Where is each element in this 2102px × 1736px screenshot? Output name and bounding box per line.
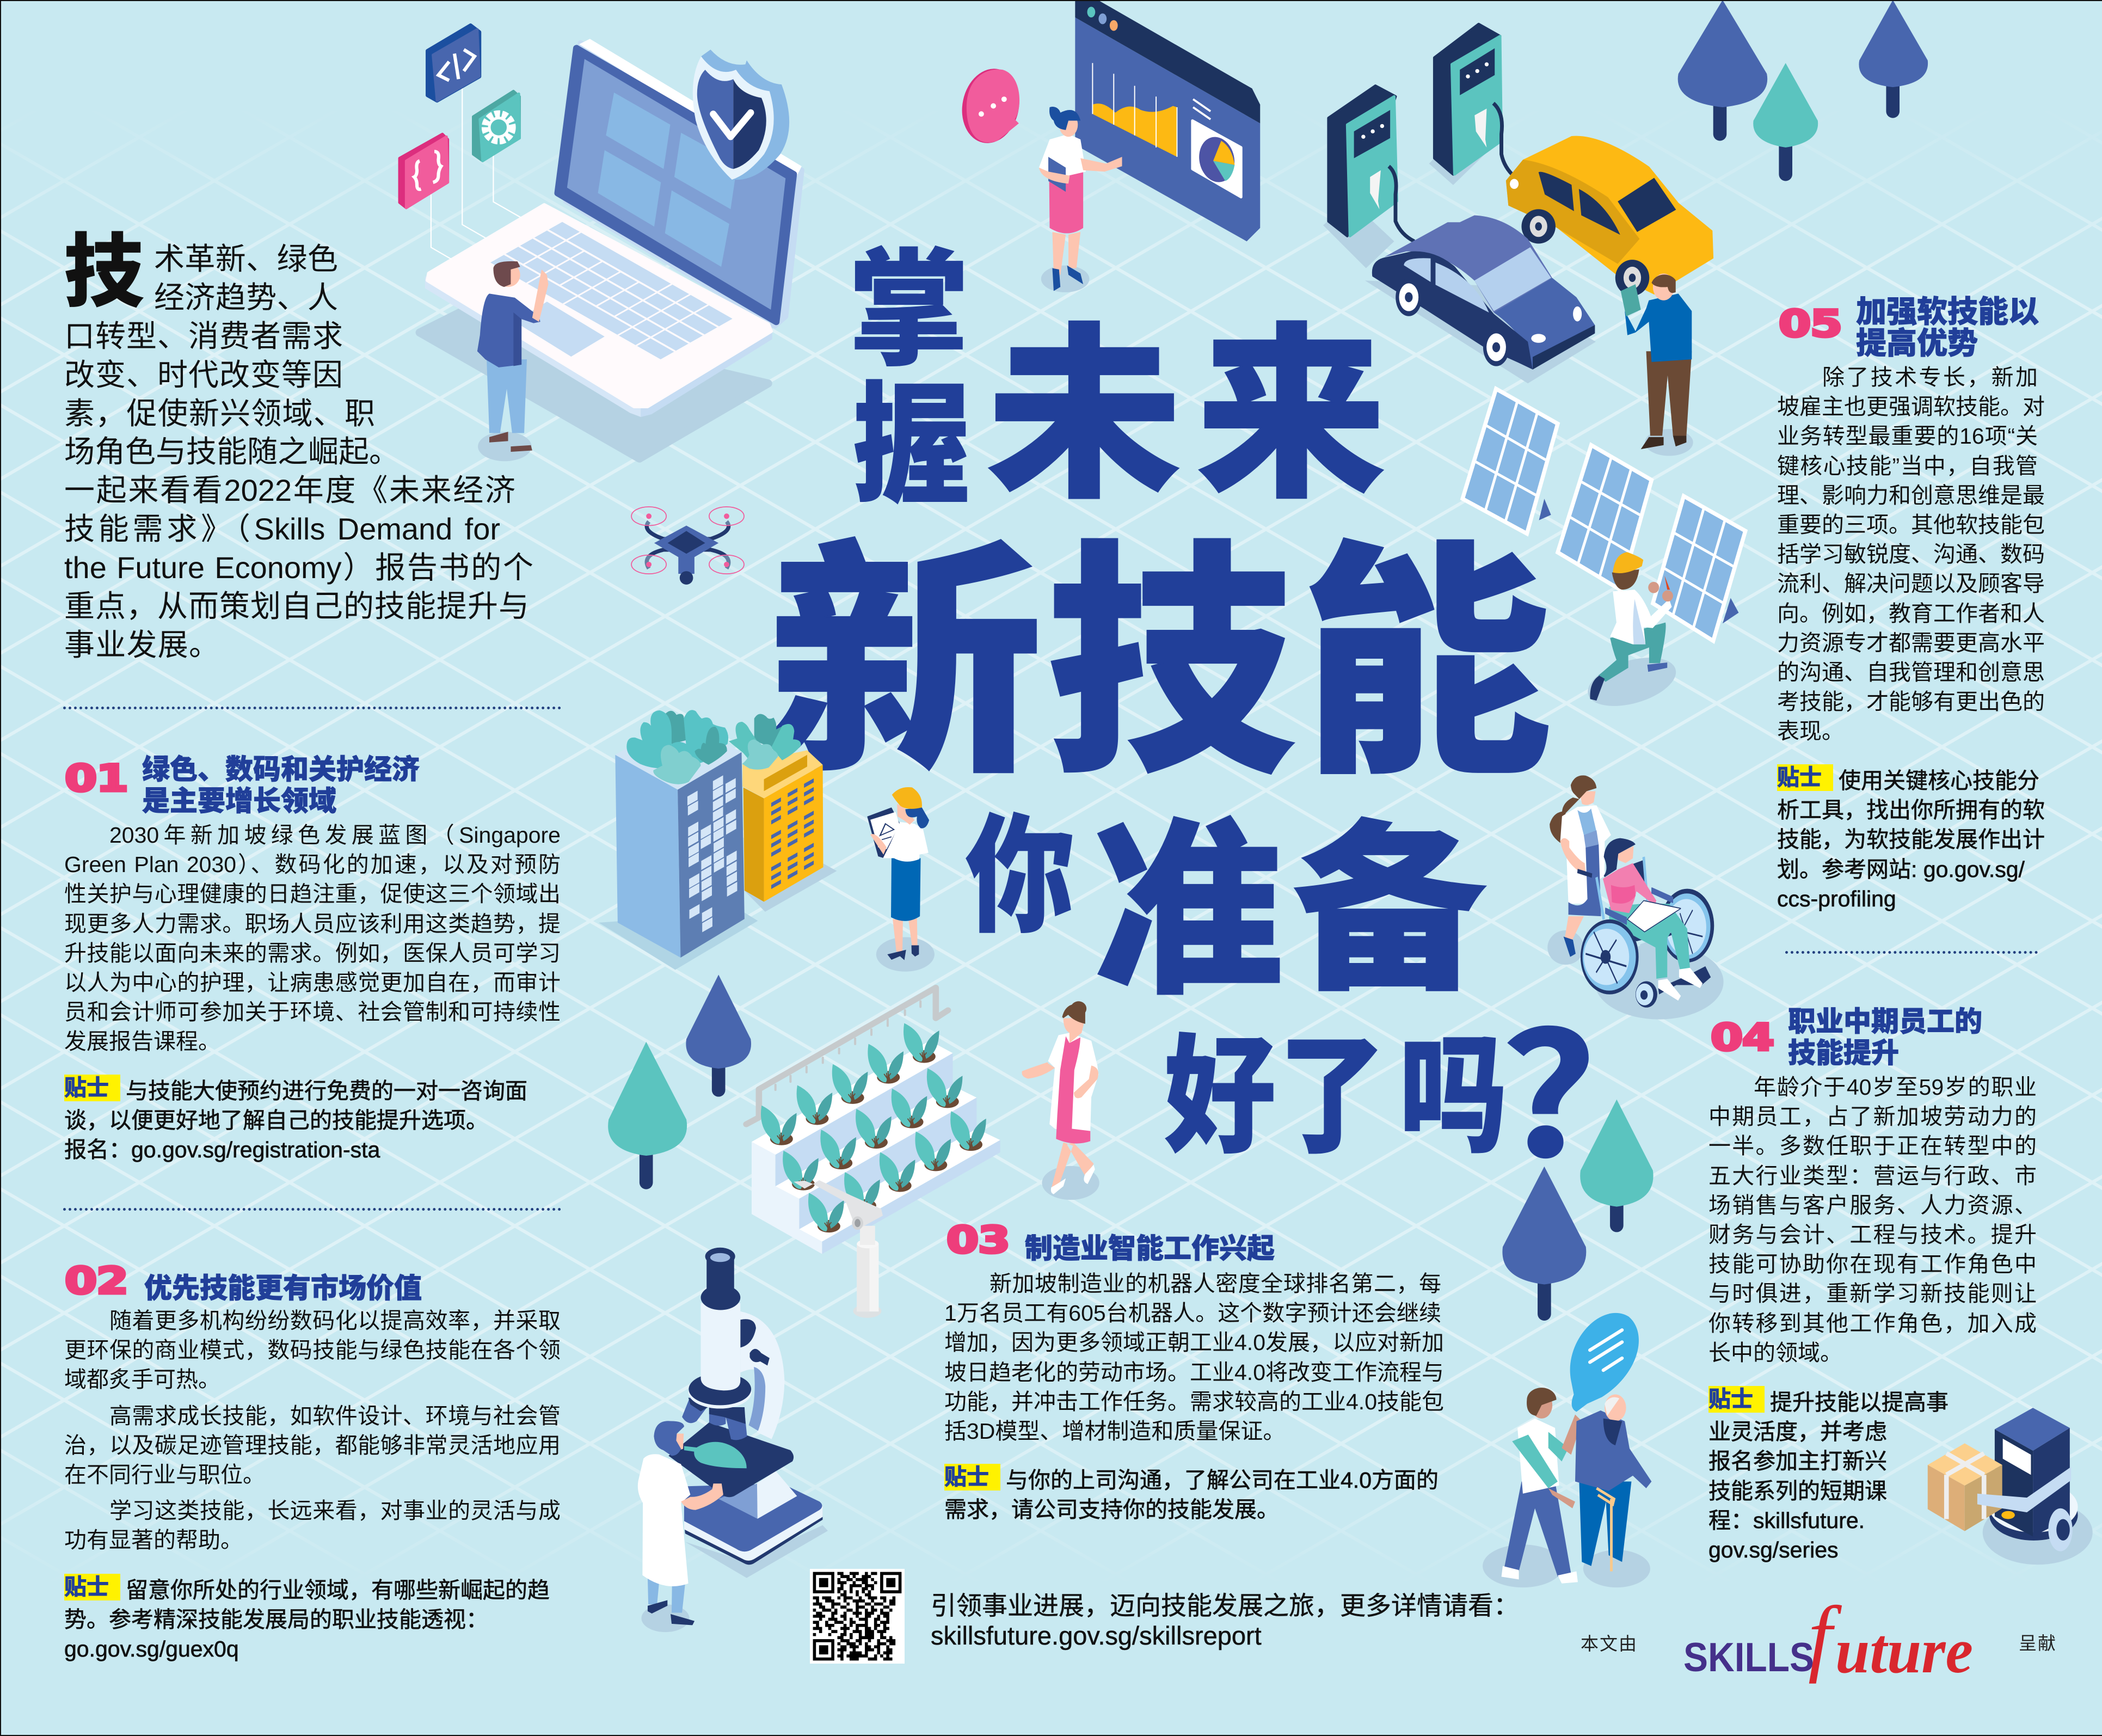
section 04 tip: 程：skillsfuture. (1708, 1508, 1865, 1533)
section 05 tip: ccs-profiling (1777, 886, 1896, 911)
intro: drop cap: 技 (64, 206, 144, 323)
section 03 body: 括3D模型、增材制造和质量保证。 (944, 1419, 1285, 1444)
section 05 heading: 加强软技能以 (1856, 287, 2039, 332)
section 05 body: 括学习敏锐度、沟通、数码 (1777, 542, 2045, 567)
section 05 body: 流利、解决问题以及顾客导 (1777, 571, 2045, 596)
icon: pink speech bubble (955, 63, 1026, 149)
section 02 body: 高需求成长技能，如软件设计、环境与社会管 (109, 1403, 561, 1428)
section 02 body: 学习这类技能，长远来看，对事业的灵活与成 (109, 1498, 561, 1523)
section 04 tip: 技能系列的短期课 (1708, 1479, 1887, 1504)
section 04 body: 你转移到其他工作角色，加入成 (1708, 1311, 2037, 1336)
section 01 body: 现更多人力需求。职场人员应该利用这类趋势，提 (64, 911, 561, 936)
trees (608, 0, 1928, 1321)
section 04 heading (1788, 999, 1982, 1071)
section 04 body: 中期员工，占了新加坡劳动力的 (1708, 1104, 2037, 1129)
main title: 准 (1093, 759, 1283, 1030)
text: 重点，从而策划自己的技能提升与 (64, 589, 529, 623)
figures: carer and elderly man (1483, 1388, 1651, 1587)
figure: man with tablet (1621, 273, 1693, 456)
section 02 body: 随着更多机构纷纷数码化以提高效率，并采取 (109, 1308, 561, 1333)
section 04 tip: 提升技能以提高事 (1770, 1390, 1949, 1415)
section 03 number: 03 (946, 1219, 1010, 1262)
main title: 了 (1279, 993, 1385, 1178)
section 05 number: 05 (1779, 303, 1842, 346)
logo: SkillsFuture: f (1808, 1589, 1842, 1684)
icon: microscope (668, 1248, 828, 1578)
section 01 body: 升技能以面向未来的需求。例如，医保人员可学习 (64, 941, 561, 966)
section 05 body: 业务转型最重要的16项“关 (1777, 424, 2038, 449)
section 05 body (1777, 365, 2045, 744)
section 05 body: 向。例如，教育工作者和人 (1777, 601, 2045, 626)
section 01 body: Green Plan 2030）、数码化的加速，以及对预防 (64, 852, 561, 877)
icon: floating code tiles (399, 26, 521, 260)
main title: 备 (1293, 763, 1487, 1026)
section 04 tip: 报名参加主打新兴 (1708, 1449, 1887, 1474)
icon: delivery robot with box (1928, 1408, 2093, 1565)
section 02 body: 治，以及碳足迹管理技能，都能够非常灵活地应用 (64, 1433, 561, 1458)
figure: nurse with patient in wheelchair (1547, 775, 1724, 1020)
section 04 body: 技能可协助你在现有工作角色中 (1708, 1252, 2037, 1277)
icon: EV charging stations (1323, 24, 1536, 268)
icon: solar panels (1462, 389, 1745, 641)
text: 技能需求》（Skills Demand for (64, 512, 500, 546)
section 05 heading: 提高优势 (1856, 319, 1978, 363)
section 05 body: 理、影响力和创意思维是最 (1777, 483, 2045, 508)
section 05 body: 坡雇主也更强调软技能。对 (1777, 394, 2045, 419)
section 01 body: 2030年新加坡绿色发展蓝图（Singapore (109, 823, 561, 848)
section 04 tip (1708, 1386, 1949, 1562)
text: 素，促使新兴领域、职 (64, 396, 375, 431)
background isometric grid (1, 171, 2102, 1525)
main title: 掌 (849, 209, 969, 390)
section 01 body (64, 823, 561, 1054)
section 04 body: 场销售与客户服务、人力资源、 (1708, 1193, 2037, 1218)
text: the Future Economy）报告书的个 (64, 550, 533, 585)
footer call to action (931, 1591, 1519, 1651)
text: 经济趋势、人 (154, 280, 338, 315)
credit: presented: 呈献 (2019, 1633, 2057, 1653)
section 04 body: 年龄介于40岁至59岁的职业 (1754, 1075, 2037, 1100)
section 05 body: 除了技术专长，新加 (1822, 365, 2038, 390)
section 05 body: 考技能，才能够有更出色的 (1777, 689, 2045, 714)
main title: 新 (769, 464, 1043, 821)
section 05 body: 键核心技能”当中，自我管 (1777, 453, 2038, 479)
section 04 body: 五大行业类型：营运与行政、市 (1708, 1163, 2037, 1188)
logo: SkillsFuture: uture (1835, 1615, 1973, 1686)
logo: SkillsFuture: SKILLS (1683, 1634, 1814, 1680)
section 03 tip (944, 1464, 1439, 1522)
section 01 heading: 绿色、数码和关护经济 (142, 747, 420, 787)
section 01 body: 以人为中心的护理，让病患感觉更加自在，而审计 (64, 970, 561, 995)
section 01 tip: 贴士 (64, 1075, 109, 1100)
section 01 body: 发展报告课程。 (64, 1029, 220, 1054)
section 04 body: 与时俱进，重新学习新技能则让 (1708, 1281, 2037, 1306)
text: 改变、时代改变等因 (64, 358, 343, 392)
section 03 body: 新加坡制造业的机器人密度全球排名第二，每 (989, 1271, 1441, 1296)
section 02 body: 域都炙手可热。 (64, 1367, 220, 1392)
text: 口转型、消费者需求 (64, 319, 343, 353)
figure: scientist (638, 1421, 723, 1632)
main title: 未 (986, 265, 1182, 535)
section 04 body: 一半。多数任职于正在转型中的 (1708, 1133, 2037, 1158)
section 04 heading: 职业中期员工的 (1788, 999, 1982, 1039)
shield (694, 50, 789, 180)
section 05 body: 重要的三项。其他软技能包 (1777, 512, 2045, 537)
section 02 tip: go.gov.sg/guex0q (64, 1636, 239, 1661)
section 05 body: 的沟通、自我管理和创意思 (1777, 660, 2045, 685)
section 05 body: 表现。 (1777, 719, 1844, 744)
icon: laptop with shield (420, 39, 802, 458)
section 02 body: 在不同行业与职位。 (64, 1462, 265, 1487)
section 05 heading (1856, 287, 2039, 363)
section 01 tip: 报名：go.gov.sg/registration-sta (64, 1137, 380, 1162)
section 02 tip: 留意你所处的行业领域，有哪些新崛起的趋 (126, 1578, 550, 1603)
section 02 body: 更环保的商业模式，数码技能与绿色技能在各个领 (64, 1338, 561, 1363)
section 03 tip: 需求，请公司支持你的技能发展。 (944, 1497, 1279, 1522)
icon: blue speech bubble (1570, 1313, 1639, 1412)
section 01 tip: 与技能大使预约进行免费的一对一咨询面 (126, 1078, 527, 1103)
section 04 heading: 技能提升 (1788, 1030, 1899, 1071)
section 02 body: 功有显著的帮助。 (64, 1528, 243, 1553)
section 04 tip: 业灵活度，并考虑 (1708, 1419, 1887, 1444)
section 04 number: 04 (1711, 1016, 1774, 1059)
main title: 技 (1046, 464, 1295, 821)
icon: yellow car (1506, 136, 1713, 296)
chart board (1075, 0, 1260, 241)
section 02 body (64, 1308, 561, 1553)
section 04 body (1708, 1075, 2037, 1365)
section 03 tip: 贴士 (944, 1464, 989, 1489)
section 01 body: 性关护与心理健康的日趋注重，促使这三个领域出 (64, 881, 561, 906)
keyboard (490, 222, 733, 359)
section 01 heading: 是主要增长领域 (142, 778, 336, 819)
section 02 heading: 优先技能更有市场价值 (144, 1266, 422, 1306)
QR code (810, 1569, 905, 1664)
figure: presenter woman (1039, 107, 1122, 292)
credit: presented by: 本文由 (1581, 1634, 1638, 1654)
section 04 body: 长中的领域。 (1708, 1340, 1842, 1365)
intro text (64, 242, 533, 662)
main title: 吗 (1399, 993, 1508, 1178)
section 02 tip: 势。参考精深技能发展局的职业技能透视： (64, 1607, 488, 1632)
section 05 tip: 贴士 (1777, 765, 1822, 790)
section 01 tip: 谈，以便更好地了解自己的技能提升选项。 (64, 1108, 488, 1133)
main title: 握 (853, 340, 969, 529)
robotic arm post (794, 1180, 883, 1318)
icon: drone (631, 507, 744, 585)
section 05 tip: 使用关键核心技能分 (1839, 768, 2039, 793)
section 02 tip (64, 1574, 550, 1661)
figure: doctor woman (1022, 1001, 1099, 1200)
main title: ? (1499, 961, 1597, 1204)
section 04 tip: gov.sg/series (1708, 1537, 1839, 1562)
section 04 tip: 贴士 (1708, 1387, 1753, 1412)
icon: hydroponic plant racks (746, 987, 1000, 1318)
text: 场角色与技能随之崛起。 (64, 434, 399, 469)
main title: 好 (1164, 992, 1276, 1178)
section 05 body: 力资源专才都需要更高水平 (1777, 630, 2045, 655)
text: 一起来看看2022年度《未来经济 (64, 473, 515, 507)
section 04 body: 财务与会计、工程与技术。提升 (1708, 1222, 2037, 1247)
section 03 body: 坡日趋老化的劳动市场。工业4.0将改变工作流程与 (944, 1360, 1444, 1385)
main title: 你 (966, 773, 1074, 958)
section 02 number: 02 (65, 1260, 128, 1303)
icon: office buildings with rooftop plants (599, 710, 837, 970)
section 03 body (944, 1271, 1444, 1444)
section 02 tip: 贴士 (64, 1574, 109, 1599)
figure: engineer woman with clipboard (867, 787, 935, 972)
icon: blue car (1365, 215, 1596, 383)
section 01 number: 01 (65, 757, 128, 800)
footer call to action: 引领事业进展，迈向技能发展之旅，更多详情请看： (931, 1591, 1519, 1620)
footer call to action: skillsfuture.gov.sg/skillsreport (931, 1621, 1262, 1650)
section 03 tip: 与你的上司沟通，了解公司在工业4.0方面的 (1006, 1468, 1439, 1493)
section 05 tip: 划。参考网站: go.gov.sg/ (1777, 857, 2025, 882)
section 01 tip (64, 1075, 527, 1162)
main title: 能 (1300, 464, 1552, 821)
text: 事业发展。 (64, 628, 219, 662)
figure: engineer kneeling at solar panel (1586, 552, 1677, 714)
section 05 tip: 析工具，找出你所拥有的软 (1777, 798, 2045, 823)
section 03 body: 增加，因为更多领域正朝工业4.0发展，以应对新加 (944, 1330, 1444, 1355)
main title: 来 (1196, 264, 1387, 535)
section 01 heading (142, 747, 420, 819)
section 05 tip (1777, 764, 2045, 911)
section 03 heading: 制造业智能工作兴起 (1025, 1226, 1275, 1266)
section 05 tip: 技能，为软技能发展作出计 (1777, 827, 2045, 852)
figure: man at laptop (477, 261, 548, 461)
section 01 body: 员和会计师可参加关于环境、社会管制和可持续性 (64, 999, 561, 1025)
text: 术革新、绿色 (154, 242, 338, 276)
section 03 body: 功能，并冲击工作任务。需求较高的工业4.0技能包 (944, 1389, 1444, 1414)
section 03 body: 1万名员工有605台机器人。这个数字预计还会继续 (944, 1301, 1441, 1326)
